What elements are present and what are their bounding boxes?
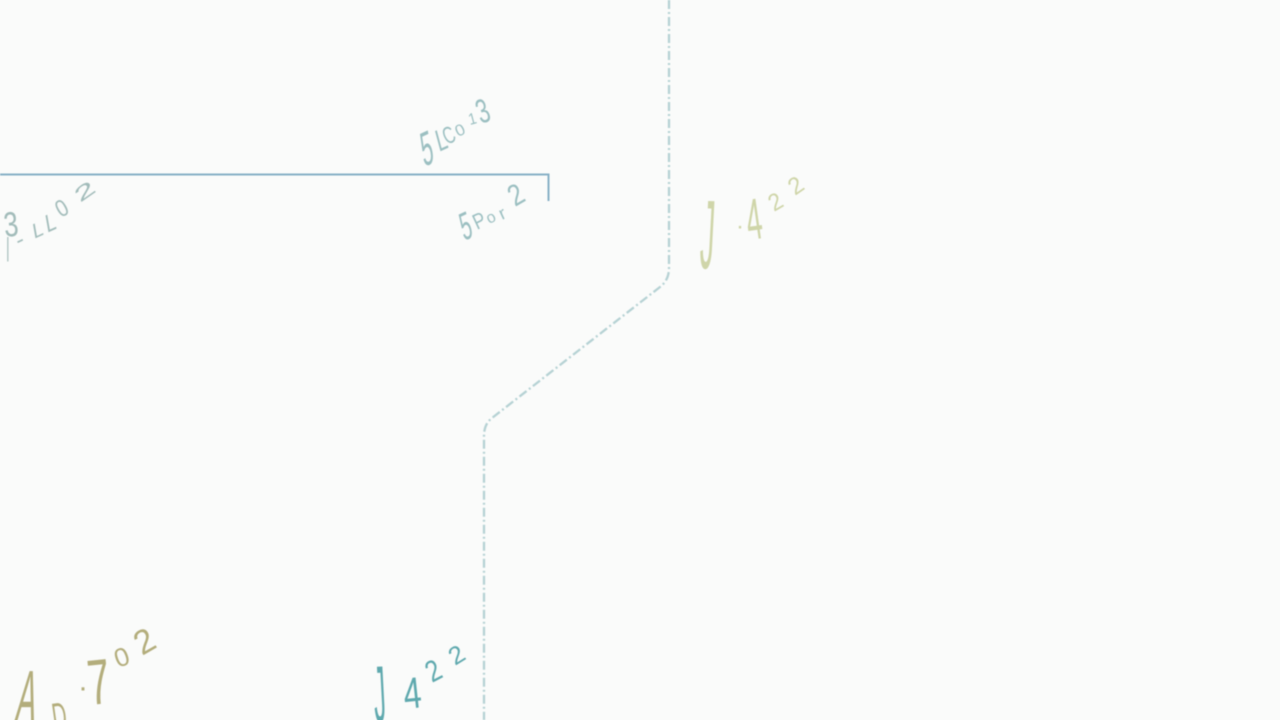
label: lower line value: P [469,208,490,235]
label: lower line value [455,177,530,249]
label: lower line value: 5 [455,202,476,249]
label: left line value: L [31,217,45,244]
label: upper line value: C [439,122,460,150]
label: upper line value: 1 [466,110,479,129]
dashed routing line [484,0,669,720]
label: left line value: 3 [2,204,20,245]
label: bottom left value [12,621,162,720]
label: left line value: L [43,207,58,238]
label: left line value [2,177,100,262]
label: bottom left value: 0 [110,640,134,674]
label: upper line value: L [432,122,451,159]
label: right value: 2 [763,187,788,216]
label: lower line value: r [495,203,509,224]
label: bottom centre value: 2 [444,640,470,671]
label: lower line value: o [484,208,499,228]
label: right value [698,171,809,290]
label: upper line value: 3 [471,92,495,132]
label: left line value: 0 [50,194,73,223]
label: left line value: | [6,234,10,262]
label: bottom centre value: 2 [419,652,447,689]
label: right value: 4 [742,186,766,253]
solid blue bracket line [0,174,548,201]
label: upper line value: 5 [416,119,437,177]
label: upper line value: 0 [452,121,468,141]
label: right value: 2 [783,171,809,201]
label: bottom left value: 7 [84,647,114,719]
label: bottom left value: 2 [127,621,162,663]
label: upper line value [416,92,495,177]
label: left line value: - [11,226,28,252]
label: lower line value: 2 [501,177,530,213]
label: bottom centre value: 4 [401,668,424,719]
label: bottom left value: · [78,671,88,704]
label: right value: · [736,213,744,240]
label: bottom centre value [371,640,470,720]
label: right value: J [698,181,718,290]
label: left line value: 2 [70,177,100,207]
